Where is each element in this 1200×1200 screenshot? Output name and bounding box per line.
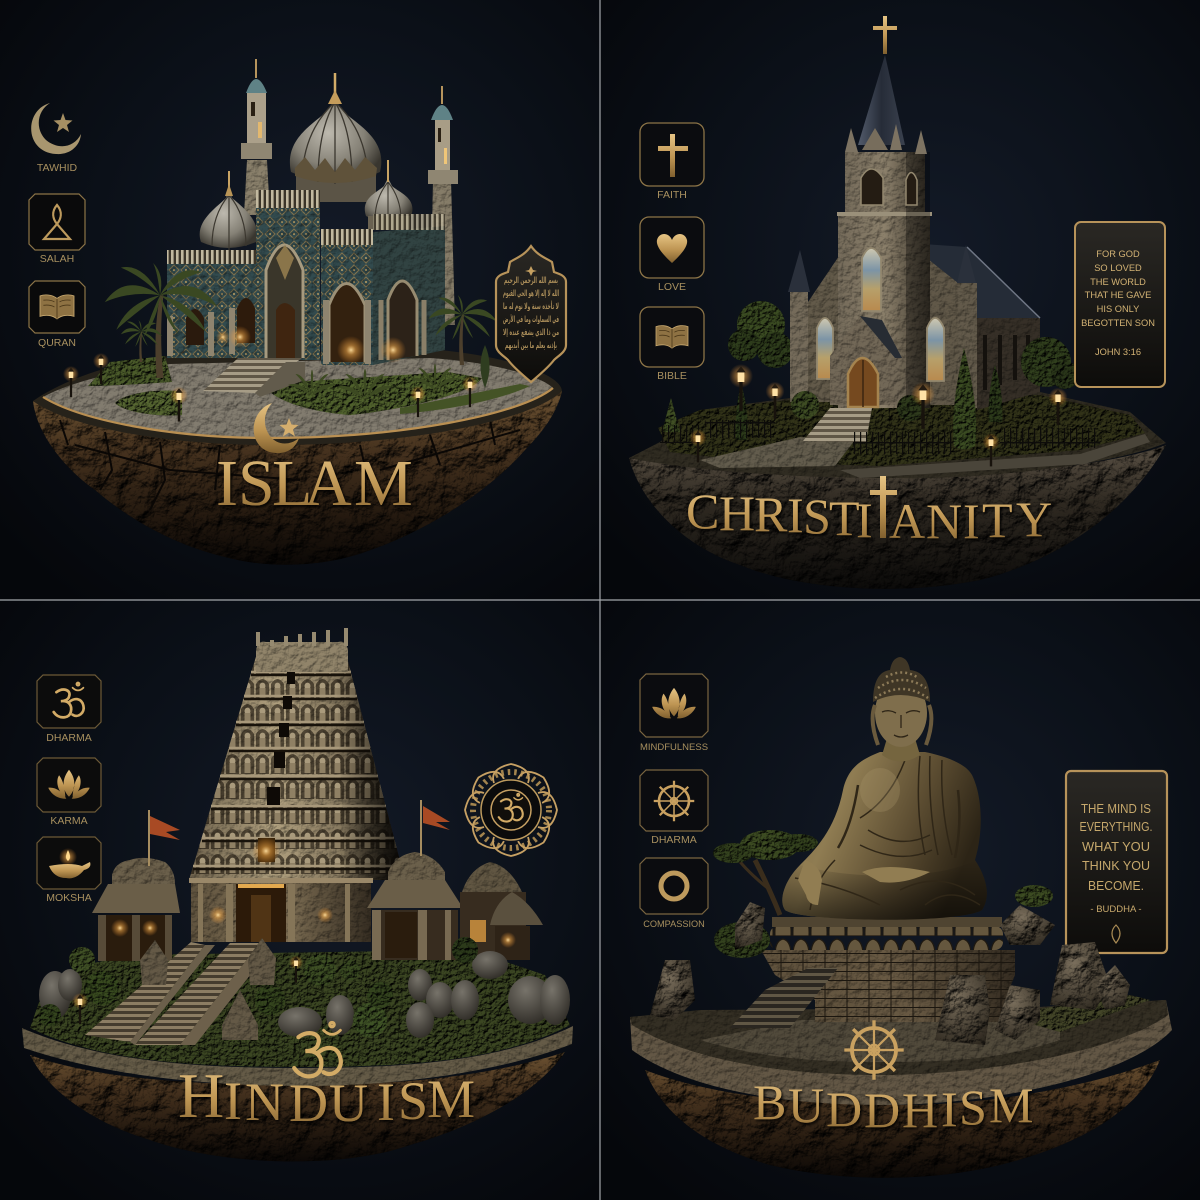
- plaque: John 3:16: THE WORLD: [1090, 277, 1146, 287]
- stained glass windows: [817, 248, 944, 381]
- Buddha statue: [782, 657, 987, 920]
- shrubs: [39, 937, 478, 1037]
- plaque: calligraphy: الله لا إله إلا هو الحي القيوم: [503, 289, 559, 299]
- label: Tawhid: TAWHID: [37, 162, 78, 174]
- om emblem: [294, 1023, 341, 1076]
- plaque: calligraphy: لا تأخذه سنة ولا نوم له ما: [503, 300, 559, 312]
- label: Dharma: DHARMA: [651, 834, 697, 846]
- crescent emblem: [254, 403, 299, 453]
- entrance stairs: [203, 358, 302, 393]
- stair wall: [255, 362, 305, 397]
- bonsai tree: [713, 830, 1053, 958]
- hair: [873, 657, 930, 702]
- face: [882, 711, 920, 737]
- church: [788, 16, 1040, 442]
- tower: [837, 152, 932, 408]
- arch lights: [216, 326, 406, 364]
- hair curls: [875, 672, 928, 698]
- plaque: Buddha quote: THE MIND IS: [1081, 801, 1151, 816]
- robe folds: [795, 756, 980, 910]
- plaque: calligraphy: في السماوات وما في الأرض: [503, 314, 559, 325]
- label: Quran: QURAN: [38, 337, 76, 349]
- plaque: Buddha quote: EVERYTHING.: [1080, 819, 1152, 834]
- pedestal stairs: [730, 968, 838, 1028]
- label: Bible: BIBLE: [657, 370, 687, 382]
- garden hill: [30, 950, 570, 1067]
- icon: Karma box: [37, 758, 101, 812]
- title: Hinduism: HINDUISM: [178, 1060, 475, 1133]
- neck: [882, 735, 920, 762]
- label: Faith: FAITH: [657, 189, 687, 201]
- stone rim: [22, 1026, 573, 1086]
- icon: crescent and star Tawhid: [31, 103, 81, 154]
- back tree: [728, 301, 793, 368]
- statue body: [782, 752, 987, 920]
- palm trees: [105, 263, 497, 400]
- church stairs: [803, 408, 872, 442]
- plaque: John 3:16: FOR GOD: [1096, 249, 1140, 259]
- plaque: Buddha quote: THINK YOU: [1082, 858, 1150, 873]
- temple hall: [189, 878, 373, 942]
- icon: Salah box: [29, 194, 85, 250]
- island terrace: [629, 392, 1166, 478]
- plaque: calligraphy: [496, 246, 566, 382]
- head: [875, 679, 927, 747]
- icon: Quran box: [29, 281, 85, 333]
- plaque: John 3:16: [1075, 222, 1165, 387]
- plaque: calligraphy: من ذا الذي يشفع عنده إلا: [503, 328, 559, 338]
- icon: Bible box: [640, 307, 704, 367]
- panel: Christianity: [600, 0, 1200, 600]
- plaque: John 3:16: SO LOVED: [1094, 263, 1142, 273]
- floating rock island: [30, 1052, 565, 1161]
- title: Islam: ISLAM: [216, 447, 413, 520]
- icon: Faith box: [640, 123, 704, 186]
- icon: Mindfulness box: [640, 674, 708, 737]
- plaque: Buddha quote: BECOME.: [1088, 878, 1144, 893]
- panel: Hinduism: [0, 600, 600, 1200]
- ears: [873, 705, 931, 745]
- left minaret: [241, 59, 272, 215]
- panel: Buddhism: [600, 600, 1200, 1200]
- right minaret: [428, 86, 458, 325]
- plaque: John 3:16: JOHN 3:16: [1095, 347, 1141, 357]
- label: Moksha: MOKSHA: [46, 892, 92, 904]
- fences: [660, 420, 1100, 454]
- title: Buddhism: BUDDHISM: [753, 1074, 1033, 1138]
- label: Karma: KARMA: [50, 815, 88, 827]
- plaque: Buddha quote: [1066, 771, 1167, 953]
- floating rock island: [629, 445, 1166, 589]
- path lamps: [63, 353, 478, 422]
- spire and pinnacles: [845, 55, 927, 154]
- left wing: [167, 250, 257, 358]
- left dome: [200, 171, 257, 250]
- plaque: John 3:16: THAT HE GAVE: [1085, 290, 1151, 300]
- plaque: calligraphy: بإذنه يعلم ما بين أيديهم: [505, 339, 557, 351]
- belfry windows: [861, 169, 917, 205]
- main portal block: [256, 190, 320, 360]
- stone terraces: [630, 995, 1172, 1105]
- statue hands: [798, 860, 930, 905]
- plaque: Buddha quote: WHAT YOU: [1082, 839, 1150, 854]
- icon: Compassion box: [640, 858, 708, 914]
- right dome: [365, 160, 412, 230]
- churchyard lamps: [690, 364, 1068, 466]
- central dome: [290, 73, 381, 202]
- porch: [830, 316, 902, 407]
- chest highlight: [860, 768, 900, 812]
- garden lamps: [72, 956, 303, 1024]
- right turret: [957, 245, 977, 408]
- plaque: calligraphy: بسم الله الرحمن الرحيم: [504, 276, 558, 286]
- small shrines: [140, 938, 276, 1040]
- deck with marble plaza: [33, 350, 562, 445]
- churchyard trees: [662, 337, 1079, 450]
- label: Mindfulness: MINDFULNESS: [640, 742, 708, 753]
- plaque: Buddha quote: - BUDDHA -: [1090, 904, 1142, 915]
- flags: [149, 800, 450, 866]
- icon: Dharma box: [37, 675, 101, 728]
- nave left wall: [808, 256, 841, 402]
- panel: Islam: [0, 0, 600, 600]
- label: Compassion: COMPASSION: [643, 919, 705, 929]
- lap shading: [782, 860, 987, 920]
- rocks: [650, 902, 1130, 1045]
- gold cross on spire: [873, 16, 897, 54]
- twin stairways: [85, 942, 270, 1045]
- floating rock island: [33, 391, 562, 565]
- title cross: [870, 476, 897, 538]
- nave right wall: [906, 243, 958, 405]
- title: Christianity: CHRISTIANITY: [686, 483, 1052, 549]
- mandala medallion: [465, 764, 557, 856]
- stepped pedestal: [761, 917, 1015, 1022]
- label: Love: LOVE: [658, 281, 686, 293]
- left turret: [788, 250, 810, 402]
- floating rock island: [645, 1060, 1160, 1178]
- plaque: John 3:16: HIS ONLY: [1097, 304, 1139, 314]
- plaque: John 3:16: BEGOTTEN SON: [1081, 318, 1155, 328]
- icon: Love box: [640, 217, 704, 278]
- right wing side: [373, 214, 445, 365]
- right pavilions: [367, 852, 543, 960]
- mosque: [167, 59, 458, 397]
- dharma wheel emblem: [844, 1020, 904, 1080]
- right wing front: [321, 229, 373, 365]
- gopuram tower: [189, 628, 405, 880]
- icon: Dharma box: [640, 770, 708, 831]
- icon: Moksha box: [37, 837, 101, 889]
- left pavilion: [92, 858, 180, 961]
- boulders: [39, 951, 570, 1038]
- side roof and wall: [908, 243, 1040, 410]
- label: Salah: SALAH: [40, 253, 74, 265]
- label: Dharma: DHARMA: [46, 732, 92, 744]
